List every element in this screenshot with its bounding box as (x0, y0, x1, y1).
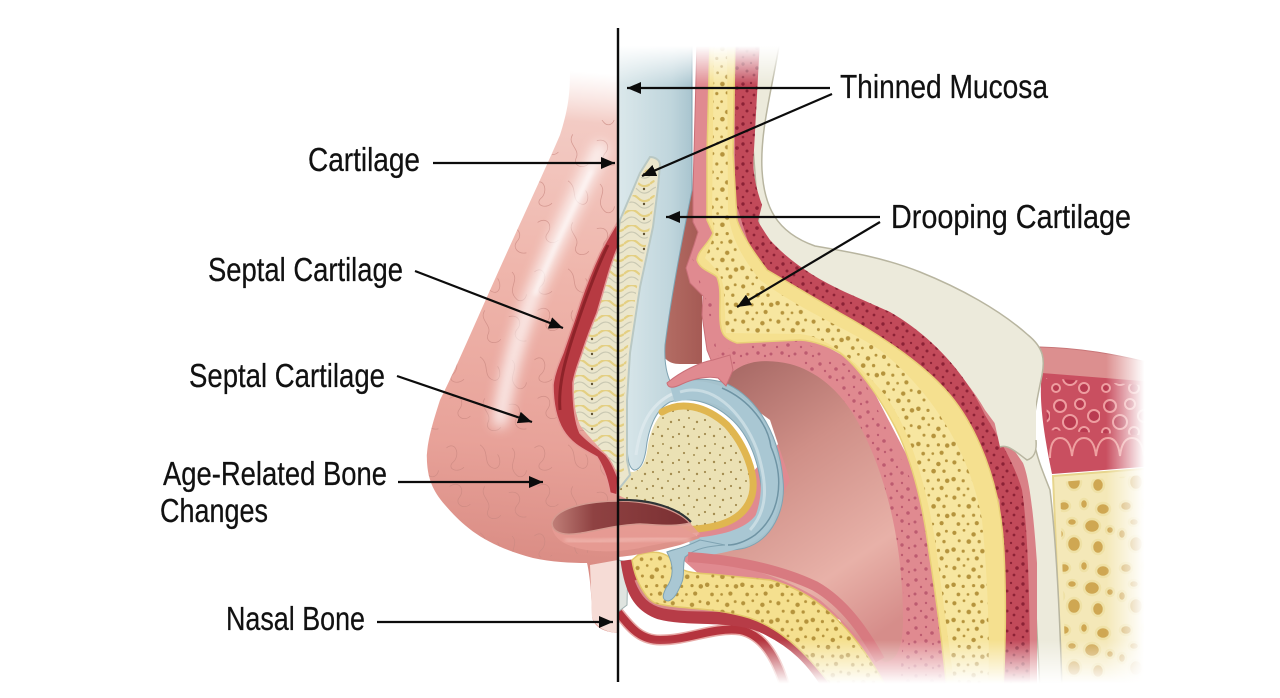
panel: posterior white cartilage band (745, 40, 1062, 690)
label: Drooping Cartilage: Drooping Cartilage (891, 198, 1131, 235)
panel: lower yellow bone and tissues (618, 540, 888, 690)
brown pharyngeal recess (660, 190, 702, 364)
red marrow zone (1041, 373, 1155, 474)
arrow: Septal Cartilage lower (397, 376, 532, 422)
arc sheen (680, 390, 765, 530)
skin highlight (500, 150, 600, 420)
midline vertical rule (617, 28, 619, 682)
pink column (686, 40, 745, 365)
arrows: Drooping Cartilage (666, 217, 880, 307)
panel: red vascular layer (725, 40, 1037, 690)
arrow: Cartilage (433, 162, 615, 164)
arc body (672, 390, 770, 548)
panel: external nose skin (427, 70, 700, 633)
philtrum shading (590, 560, 618, 633)
blue tail on top (663, 540, 725, 601)
panel: pink mucosal layer and wall (683, 40, 955, 690)
label: Age-Related Bone Changes (160, 455, 387, 529)
panel: dotted cartilage ball (618, 404, 754, 532)
pink wall dots (690, 250, 950, 685)
pink edge of cavity floor (688, 557, 880, 660)
red septal band (553, 223, 618, 495)
lower yellow fill (632, 552, 888, 690)
arrow: Age-Related Bone Changes (398, 481, 543, 483)
cream cancellous bone (1053, 468, 1155, 690)
label: Age-Related Bone Changes: Age-Related Bone (163, 455, 387, 492)
label: Nasal Bone: Nasal Bone (226, 600, 365, 637)
panel: upper yellow bone (697, 40, 1005, 690)
label: Cartilage: Cartilage (308, 141, 420, 178)
edge fades (610, 25, 1280, 698)
panel: inner septal cartilage left of midline (574, 240, 618, 475)
label: Septal Cartilage upper: Septal Cartilage (208, 251, 403, 288)
panel: blue mucosal field and arcs (618, 40, 783, 601)
lower vessel (618, 612, 786, 690)
pink hook over blue stem (667, 355, 733, 387)
skin squiggle texture (427, 120, 618, 558)
cartilage cap lower lobe (994, 400, 1036, 460)
panel: posterior bone block (1040, 347, 1155, 690)
pink inner wall (683, 332, 955, 690)
label: Age-Related Bone Changes: Changes (160, 492, 268, 529)
arc layer separation (722, 388, 779, 545)
upper red column (737, 40, 762, 225)
label: Septal Cartilage lower: Septal Cartilage (189, 357, 385, 394)
panel: septal cartilage strip (618, 157, 660, 490)
label: Thinned Mucosa: Thinned Mucosa (840, 68, 1049, 105)
arrow: Nasal Bone (377, 621, 613, 623)
lower red layer (628, 560, 832, 690)
pink cap (1040, 347, 1155, 385)
arrows: Thinned Mucosa (627, 88, 832, 176)
pale septal base (618, 560, 628, 612)
panel: nostril (552, 500, 700, 551)
arrow: Septal Cartilage upper (415, 271, 563, 328)
panel: nasal cavity (700, 361, 903, 662)
